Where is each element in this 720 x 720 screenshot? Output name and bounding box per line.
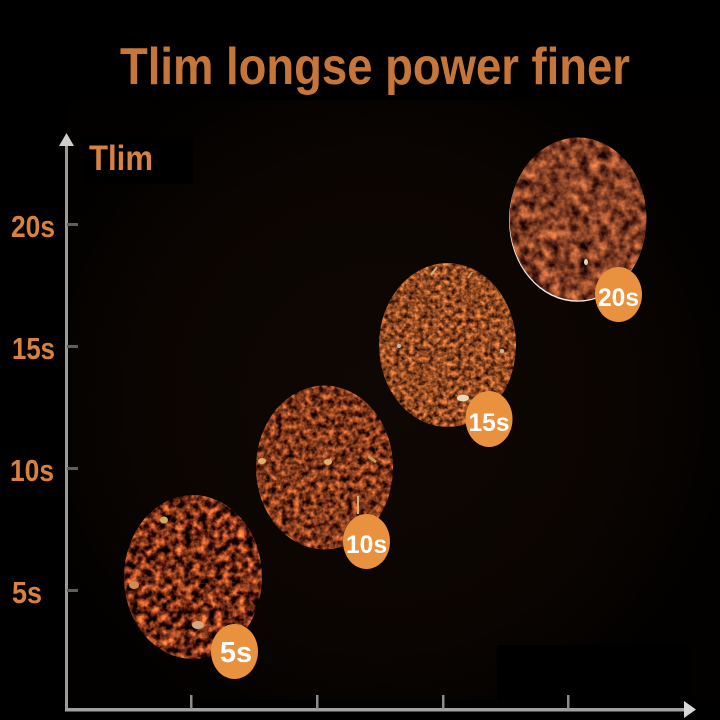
x axis [65,695,696,718]
badge: 5s [211,624,258,679]
y axis title: Tlim [89,139,153,178]
y axis [59,133,78,711]
title: Tlim longse power finer [120,38,630,96]
badge: 15s [466,391,512,447]
badge: 15s: 15s [468,409,510,437]
y axis labels: 10s [10,453,54,488]
sample: 10s grind [256,386,393,569]
y axis labels: 5s [12,575,42,610]
y axis labels: 20s [11,209,55,244]
badge: 20s: 20s [598,284,639,312]
badge: 5s: 5s [220,637,252,669]
sample: 15s grind [379,263,516,447]
badge: 10s: 10s [346,531,387,559]
y axis labels [10,209,55,610]
y axis labels: 15s [12,331,55,366]
badge: 20s [595,267,642,322]
sample: 20s grind [509,138,646,322]
sample: 5s grind [124,495,262,679]
badge: 10s [343,514,390,569]
